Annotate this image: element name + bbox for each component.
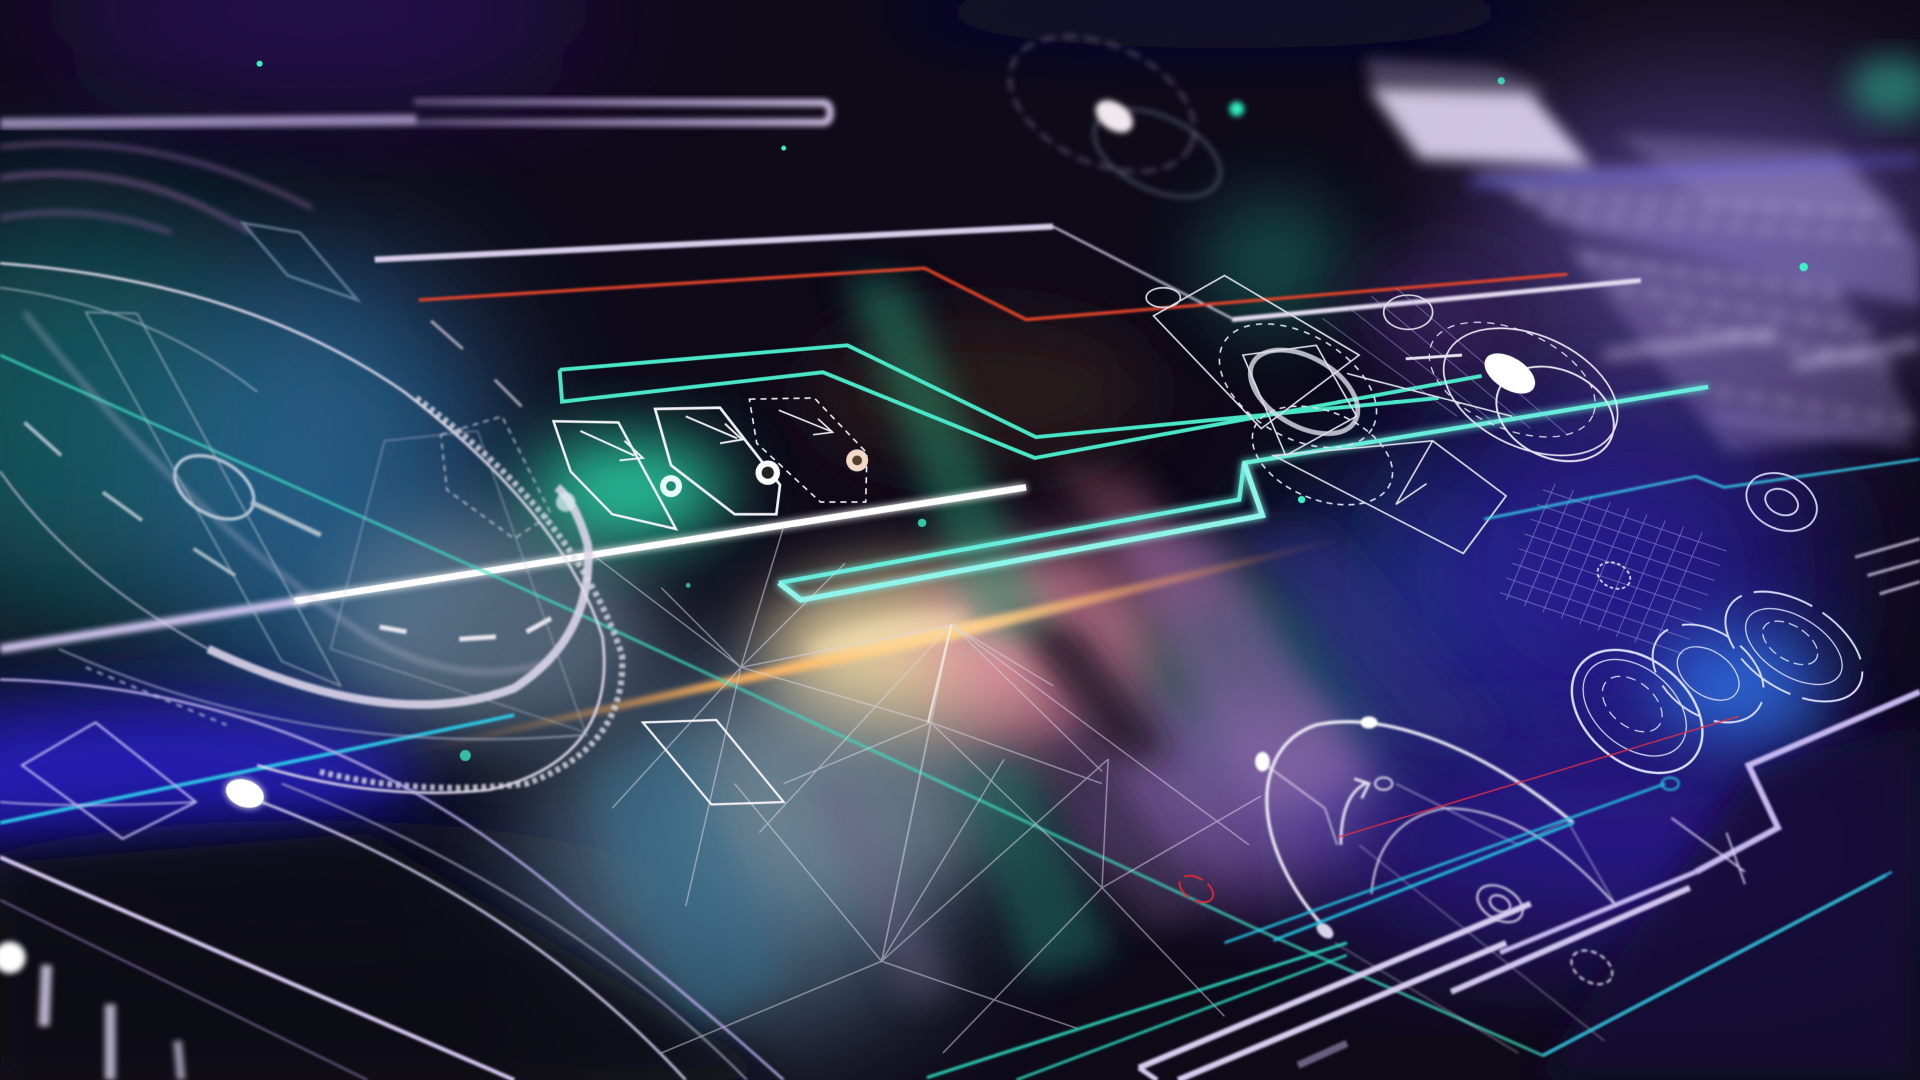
- teal particles: [257, 61, 1808, 761]
- icon: middle chevron tile: [655, 408, 780, 514]
- speaker rings: [1548, 569, 1882, 798]
- long teal diagonal: [0, 355, 1886, 1056]
- radar with bright ellipse: [1406, 299, 1637, 481]
- top-right blurred data panels: [1365, 59, 1920, 453]
- blurred top bar: [0, 102, 830, 124]
- lower-right lavender bars: [1139, 692, 1920, 1080]
- teal outlined bracket: [560, 345, 1482, 458]
- wire cube: [1146, 276, 1512, 553]
- right tech cluster: [1146, 276, 1727, 654]
- top-centre blurred radar: [988, 9, 1244, 215]
- icon: right dashed chevron tile: [749, 398, 868, 502]
- right edge blurred fragment: [1855, 539, 1920, 594]
- background: diagonal colour streaks: [588, 276, 1506, 1041]
- small circular icon right: [1593, 462, 1826, 594]
- bottom-left blurred tick marks: [0, 942, 181, 1080]
- parallelogram outline: [643, 720, 784, 804]
- glowing white node: [222, 774, 268, 813]
- icon: left chevron tile: [553, 421, 682, 529]
- right cyan horizontal line: [1484, 459, 1920, 519]
- dark lower-right corner: [1531, 722, 1920, 1080]
- white and orange upper circuit lines: [375, 227, 1641, 320]
- main white streak: [0, 487, 1026, 649]
- blue and teal horizontal line, left: [0, 715, 514, 823]
- left gauge: [0, 223, 622, 793]
- horizontal lens flare: [367, 529, 1384, 762]
- top-left blurred arcs: [0, 143, 312, 233]
- radial wire web, centre: [588, 527, 1261, 1053]
- lower circular diagram: [1255, 716, 1618, 1053]
- cyan outlined bracket: [779, 387, 1708, 600]
- lower cyan lines: [927, 778, 1892, 1080]
- hexagon arrow icons: [553, 398, 868, 529]
- thin red line: [1337, 716, 1739, 838]
- dark lower band: [0, 833, 784, 1080]
- bottom-left curves: [0, 680, 784, 1080]
- mesh grid: [1322, 288, 1727, 654]
- small red ring: [1175, 870, 1218, 908]
